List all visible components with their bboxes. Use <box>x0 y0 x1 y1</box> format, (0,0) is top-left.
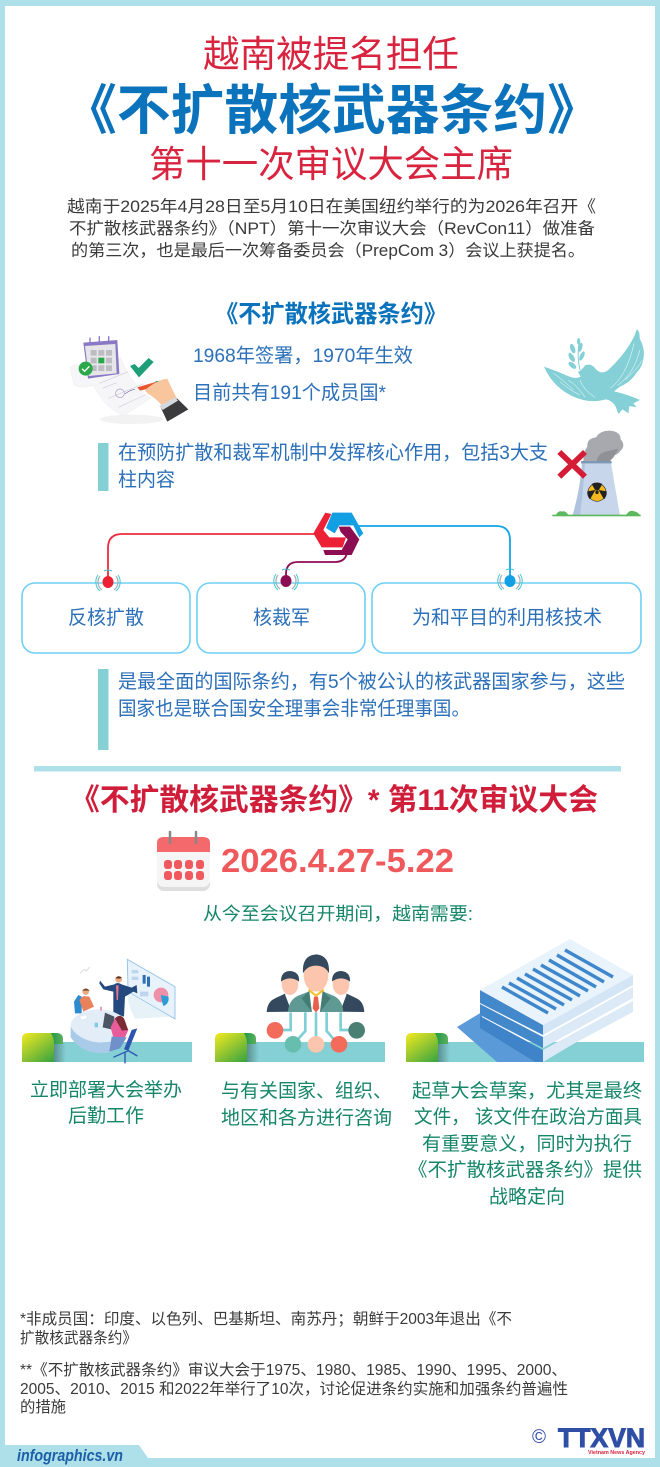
text: task 3: 战略定向 <box>489 1186 565 1208</box>
text: task 3: 《不扩散核武器条约》提供 <box>408 1159 642 1181</box>
intro text: 不扩散核武器条约》（NPT）第十一次审议大会（RevCon11）做准备 <box>69 219 596 238</box>
date: 2026.4.27-5.22 <box>221 842 454 879</box>
footnote 1 <box>20 1310 512 1347</box>
subheading: 从今至会议召开期间，越南需要: <box>203 904 473 924</box>
title: 越南被提名担任 <box>203 34 459 75</box>
box: peaceful use: 为和平目的利用核技术 <box>412 607 602 629</box>
footnote 2: 的措施 <box>20 1398 66 1416</box>
ribbon 2 <box>215 1033 385 1062</box>
intro text: 的第三次，也是最后一次筹备委员会（PrepCom 3）会议上获提名。 <box>71 241 585 260</box>
title <box>63 34 601 185</box>
footnote 1: 扩散核武器条约》 <box>20 1329 137 1347</box>
text: core role: 柱内容 <box>118 469 175 491</box>
text: core role: 在预防扩散和裁军机制中发挥核心作用，包括3大支 <box>118 442 548 464</box>
footer tab: infographics.vn <box>17 1447 123 1465</box>
icon: hexagon logo <box>313 513 363 555</box>
box: disarmament <box>197 583 365 653</box>
text: task 3 <box>408 1080 642 1208</box>
intro text: 越南于2025年4月28日至5月10日在美国纽约举行的为2026年召开《 <box>67 197 596 216</box>
intro text <box>67 197 596 260</box>
connector node: blue <box>498 569 522 590</box>
text: core role <box>118 442 548 491</box>
icon: document stack <box>457 939 633 1062</box>
box: non-proliferation <box>22 583 190 653</box>
section heading: 11th review conference: 《不扩散核武器条约》* 第11次审议大会 <box>70 784 598 817</box>
copyright logo <box>532 1423 646 1456</box>
connector node: purple <box>274 569 298 590</box>
box: peaceful use <box>372 583 641 653</box>
icon: signing document <box>70 337 188 424</box>
text: task 2 <box>221 1080 392 1129</box>
text: task 2: 与有关国家、组织、 <box>221 1080 392 1102</box>
box: disarmament: 核裁军 <box>253 607 310 629</box>
text: most comprehensive treaty: 是最全面的国际条约，有5个被公认的核武器国家参与，这些 <box>118 671 625 693</box>
text: task 3: 有重要意义，同时为执行 <box>422 1133 632 1155</box>
section heading: NPT: 《不扩散核武器条约》 <box>215 301 447 328</box>
footnote 2 <box>20 1361 568 1416</box>
text: task 2: 地区和各方进行咨询 <box>221 1107 392 1129</box>
text: task 3: 起草大会草案，尤其是最终 <box>412 1080 642 1102</box>
footnote 2: 2005、2010、2015 和2022年举行了10次，讨论促进条约实施和加强条约普遍性 <box>20 1380 568 1398</box>
copyright logo: TTXVN <box>558 1423 645 1453</box>
text: task 1: 立即部署大会举办 <box>30 1079 182 1101</box>
footnote 1: *非成员国：印度、以色列、巴基斯坦、南苏丹；朝鲜于2003年退出《不 <box>20 1310 512 1328</box>
footnote 2: **《不扩散核武器条约》审议大会于1975、1980、1985、1990、1995、2000、 <box>20 1361 567 1379</box>
text: signing dates: 1968年签署，1970年生效 <box>193 345 413 367</box>
footer tab <box>0 1445 148 1467</box>
text: task 1 <box>30 1079 182 1127</box>
icon: calendar <box>157 832 210 891</box>
text: member count: 目前共有191个成员国* <box>193 382 386 404</box>
text: most comprehensive treaty <box>118 671 625 720</box>
divider band <box>34 766 621 772</box>
text: task 1: 后勤工作 <box>68 1105 144 1127</box>
connector: blue <box>358 526 510 582</box>
text: most comprehensive treaty: 国家也是联合国安全理事会非常任理事国。 <box>118 698 470 720</box>
icon: nuclear plant with cross <box>552 431 641 516</box>
ribbon 1 <box>22 1033 192 1062</box>
connector: red <box>108 534 316 582</box>
callout bar 2 <box>98 669 108 750</box>
connector node: red <box>96 570 120 591</box>
copyright logo: © <box>532 1427 546 1448</box>
icon: dove <box>544 329 644 414</box>
title: 第十一次审议大会主席 <box>149 144 513 185</box>
text: task 3: 文件， 该文件在政治方面具 <box>414 1106 642 1128</box>
icon: people network <box>267 954 365 1053</box>
copyright logo: Vietnam News Agency <box>588 1450 646 1456</box>
callout bar 1 <box>98 443 108 491</box>
ribbon 3 <box>406 1033 644 1062</box>
box: non-proliferation: 反核扩散 <box>68 607 144 629</box>
connector: purple <box>286 553 347 582</box>
icon: meeting team <box>71 959 175 1063</box>
title: 《不扩散核武器条约》 <box>63 81 601 141</box>
